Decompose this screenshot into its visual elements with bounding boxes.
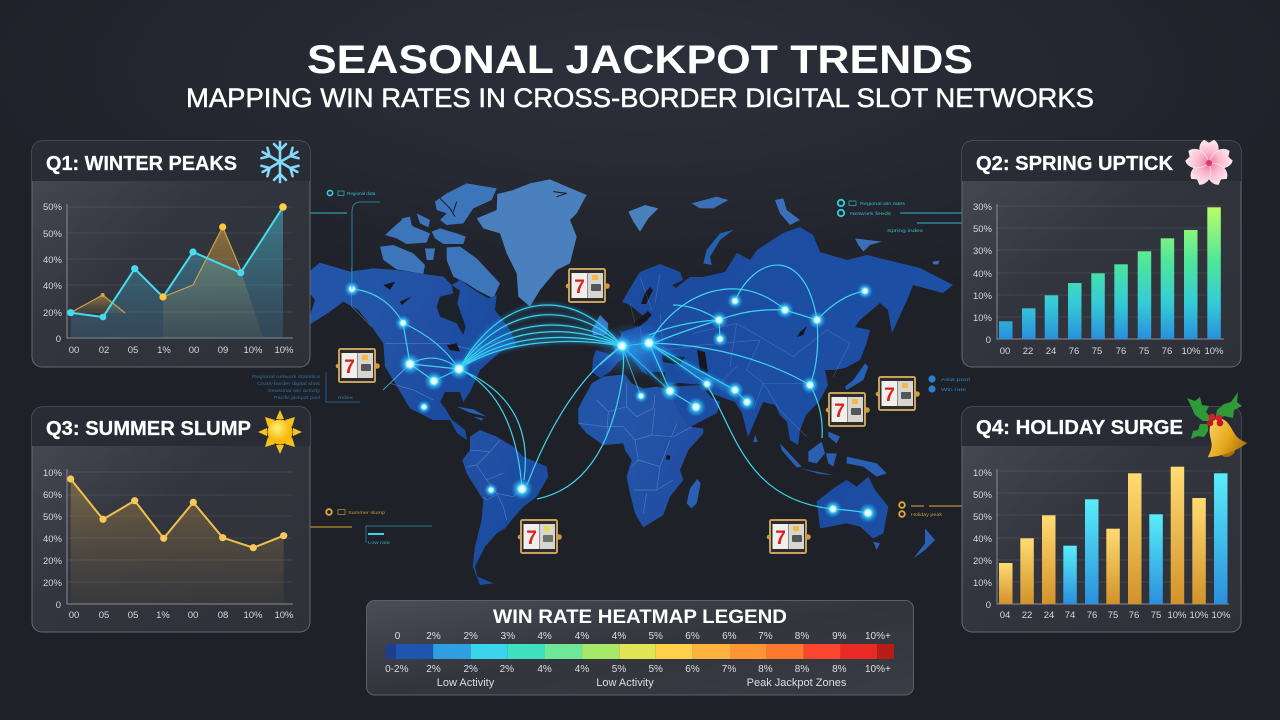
Q2 bar chart: 75	[1139, 346, 1149, 357]
slot machine icon: Pacific: 7	[344, 357, 355, 378]
Q4 bar chart: 75	[1108, 610, 1118, 621]
icon: snowflake	[260, 142, 300, 182]
Q1 line chart: 20%	[43, 308, 63, 319]
callout: Q3 connector	[300, 509, 432, 545]
legend top scale labels: 5%	[648, 631, 663, 642]
arcs glow layer	[459, 305, 747, 402]
legend bottom scale labels: 5%	[612, 664, 626, 675]
Q4 bar chart: 40%	[973, 534, 993, 545]
legend zone captions: Low Activity	[596, 677, 654, 689]
map: Europe borders	[592, 303, 720, 380]
Q4 bar chart: 50%	[973, 490, 993, 501]
legend top scale labels: 2%	[426, 631, 441, 642]
legend top scale labels: 6%	[722, 631, 737, 642]
Q1 line chart: 1%	[157, 345, 171, 356]
panel: Q1 winter peaks	[32, 141, 310, 367]
slot machine icon: Japan: 7	[884, 385, 895, 406]
callout: Q1 connector	[300, 190, 380, 289]
slot machine icon: Indian Ocean: 7	[775, 528, 786, 549]
Q3 line chart: 10%	[274, 610, 294, 621]
heatmap colour bar	[386, 644, 894, 659]
callout: Q3 connector: Low rate	[368, 540, 391, 545]
Q2 bar chart: 76	[1069, 346, 1079, 357]
Q3 header	[32, 407, 310, 446]
legend bottom scale labels: 8%	[795, 664, 809, 675]
Q1 line chart: 10%	[274, 345, 294, 356]
legend bottom scale labels: 2%	[500, 664, 514, 675]
Q4 bar chart: 10%	[973, 578, 993, 589]
transatlantic arcs	[352, 265, 868, 513]
Q2 bar chart: 00	[1000, 346, 1010, 357]
callout: Pacific labels: Cross-border digital slots	[257, 381, 321, 386]
Q1 line chart: 40%	[43, 255, 63, 266]
Q4 bar chart: 10%	[1211, 610, 1231, 621]
callout: Q2 connector: Network feeds	[850, 211, 892, 216]
Q2 heading: Q2: SPRING UPTICK	[976, 152, 1173, 175]
callout: Q3 connector: Summer slump	[348, 510, 386, 515]
slot machine icon: South China Sea: 7	[834, 401, 845, 422]
callout: Q1 connector: Regional data	[347, 191, 376, 196]
legend top scale labels: 7%	[758, 631, 773, 642]
slot machine icon: Japan	[876, 376, 920, 411]
callout: Asia label	[928, 375, 970, 393]
callout: Q4 connector: Holiday peak	[911, 512, 943, 517]
Q1 line chart: 09	[218, 345, 228, 356]
Q4 heading: Q4: HOLIDAY SURGE	[976, 416, 1183, 439]
legend top scale labels: 0	[395, 631, 401, 642]
Q4 bar chart	[973, 467, 1231, 621]
map: Africa	[578, 374, 703, 527]
Q4 bar chart: 10%	[973, 468, 993, 479]
Q2 bar chart: 10%	[973, 313, 993, 324]
callout: Asia label: Asia pool	[941, 377, 970, 382]
slot machine icon: Greenland: 7	[574, 277, 585, 298]
Q1 line chart: 40%	[43, 281, 63, 292]
legend bottom scale labels	[385, 664, 891, 675]
Q4 bar chart: 20%	[973, 556, 993, 567]
Q4 bar chart: 76	[1087, 610, 1097, 621]
legend top scale labels: 8%	[795, 631, 809, 642]
Q2 bar chart: 30%	[973, 246, 993, 257]
Q3 line chart: 0	[56, 600, 61, 611]
legend bottom scale labels: 2%	[463, 664, 478, 675]
Q4 bar chart: 10%	[1167, 610, 1187, 621]
legend zone captions: Low Activity	[437, 677, 495, 689]
Q3 line chart: 40%	[43, 534, 63, 545]
slot machine icon: South Atlantic: 7	[526, 528, 537, 549]
Q1 line chart: 10%	[243, 345, 263, 356]
icon: sun	[258, 410, 302, 454]
legend bottom scale labels: 2%	[426, 664, 441, 675]
legend bottom scale labels: 7%	[722, 664, 736, 675]
Q3 line chart	[43, 468, 294, 621]
legend top scale labels: 2%	[463, 631, 478, 642]
Q1 line chart: 00	[69, 345, 79, 356]
Q3 line chart: 60%	[43, 490, 63, 501]
slot machine icon: Pacific	[336, 348, 380, 383]
map: Arctic and Pacific islands	[628, 197, 939, 390]
panel: Q3 summer slump	[32, 407, 310, 632]
Q3 line chart: 50%	[43, 512, 63, 523]
legend top scale labels: 9%	[832, 631, 847, 642]
Q2 bar chart: 10%	[1204, 346, 1224, 357]
Q3 line chart: 20%	[43, 556, 63, 567]
legend bottom scale labels: 10%+	[865, 664, 891, 675]
callout: Q2 connector	[838, 200, 962, 233]
legend top scale labels: 10%+	[865, 631, 891, 642]
Q3 line chart: 00	[188, 610, 198, 621]
Q2 bar chart: 50%	[973, 224, 993, 235]
slot machine icon: South Atlantic	[518, 519, 562, 554]
callout: Q4 connector	[899, 502, 962, 517]
Q4 bar chart: 24	[1044, 610, 1054, 621]
Q3 line chart: 05	[128, 610, 138, 621]
Q3 line chart: 08	[218, 610, 228, 621]
map: Asia borders	[640, 273, 850, 437]
Q4 bar chart: 0	[986, 600, 991, 611]
callout: Q2 connector: Spring index	[887, 228, 924, 233]
slot machine icon: Greenland	[566, 268, 610, 303]
Q3 line chart: 10%	[243, 610, 263, 621]
Q4 bar chart: 50%	[973, 512, 993, 523]
Q2 bar chart: 10%	[1181, 346, 1201, 357]
panel: win rate heatmap legend	[366, 600, 914, 695]
Q1 line chart: 02	[99, 345, 109, 356]
legend bottom scale labels: 8%	[832, 664, 847, 675]
legend bottom scale labels: 5%	[648, 664, 663, 675]
Q2 bar chart	[973, 202, 1224, 357]
network nodes	[344, 281, 878, 523]
world map	[303, 179, 953, 585]
map: Arabia	[667, 385, 720, 428]
Q2 bar chart: 22	[1023, 346, 1033, 357]
legend bottom scale labels: 8%	[758, 664, 773, 675]
Q2 bar chart: 76	[1116, 346, 1126, 357]
legend bottom scale labels: 4%	[575, 664, 589, 675]
legend heading: WIN RATE HEATMAP LEGEND	[493, 606, 787, 628]
panel: Q4 holiday surge	[962, 392, 1249, 632]
Q3 heading: Q3: SUMMER SLUMP	[46, 417, 251, 440]
callout: Pacific labels: Seasonal win activity	[268, 388, 321, 393]
slot machine icon: South China Sea	[826, 392, 870, 427]
Q4 bar chart: 76	[1129, 610, 1139, 621]
callout: Pacific labels: Regional network statistics	[252, 374, 321, 379]
Q3 line chart: 20%	[43, 578, 63, 589]
legend top scale labels: 4%	[612, 631, 626, 642]
Q1 line chart	[43, 202, 294, 356]
panel: Q2 spring uptick	[962, 140, 1241, 367]
Q1 line chart: 05	[128, 345, 138, 356]
Q3 line chart: 10%	[43, 468, 63, 479]
network glow: Europe hub	[595, 322, 675, 378]
legend top scale labels: 3%	[501, 631, 515, 642]
Q1 heading: Q1: WINTER PEAKS	[46, 152, 237, 175]
map: North America	[303, 263, 517, 440]
legend bottom scale labels: 0-2%	[385, 664, 409, 675]
callout: Q2 connector: Regional win rates	[860, 201, 906, 206]
Q2 bar chart: 40%	[973, 269, 993, 280]
legend zone captions	[437, 677, 847, 689]
Q1 line chart: 50%	[43, 202, 63, 213]
Q2 bar chart: 75	[1092, 346, 1102, 357]
legend bottom scale labels: 4%	[537, 664, 552, 675]
Q4 header	[962, 407, 1241, 446]
Q4 bar chart: 10%	[1189, 610, 1209, 621]
legend bottom scale labels: 6%	[685, 664, 700, 675]
Q2 bar chart: 10%	[973, 291, 993, 302]
legend top scale labels	[395, 631, 891, 642]
Q2 bar chart: 24	[1046, 346, 1056, 357]
Q1 line chart: 0	[56, 334, 61, 345]
callout: Pacific labels	[252, 372, 360, 402]
map: Greenland and Arctic Canada	[380, 179, 587, 307]
Q2 bar chart: 30%	[973, 202, 993, 213]
Q4 bar chart: 04	[1000, 610, 1010, 621]
map: Caribbean islands	[457, 407, 487, 421]
network arcs	[352, 265, 868, 513]
icon: cherry blossom	[1184, 140, 1234, 187]
title: SEASONAL JACKPOT TRENDS	[307, 38, 973, 82]
Q2 header	[962, 141, 1241, 181]
legend top scale labels: 6%	[685, 631, 700, 642]
map: South America	[462, 430, 548, 585]
icon: holiday bell and holly	[1187, 392, 1249, 464]
slot machine icon: Indian Ocean	[767, 519, 811, 554]
Q1 line chart: 00	[189, 345, 199, 356]
Q1 header	[32, 141, 310, 181]
Q2 bar chart: 0	[986, 335, 991, 346]
callout: Pacific labels: Pacific jackpot pool	[274, 395, 320, 400]
Q3 line chart: 05	[99, 610, 109, 621]
Q2 bar chart: 76	[1162, 346, 1172, 357]
map: Southeast Asia and Oceania	[753, 432, 935, 558]
Q3 line chart: 1%	[156, 610, 170, 621]
Q4 bar chart: 75	[1151, 610, 1161, 621]
legend zone captions: Peak Jackpot Zones	[747, 677, 847, 689]
Q1 line chart: 50%	[43, 229, 63, 240]
Q4 bar chart: 22	[1022, 610, 1032, 621]
Q3 line chart: 00	[69, 610, 79, 621]
map: Eurasia	[592, 227, 953, 445]
subtitle: MAPPING WIN RATES IN CROSS-BORDER DIGITAL SLOT NETWORKS	[186, 83, 1094, 113]
callout: Asia label: Win rate	[941, 387, 967, 392]
callout: Pacific labels: Index	[338, 395, 354, 400]
Q4 bar chart: 74	[1065, 610, 1075, 621]
legend top scale labels: 4%	[575, 631, 589, 642]
map: inland seas	[632, 287, 807, 373]
legend top scale labels: 4%	[537, 631, 552, 642]
